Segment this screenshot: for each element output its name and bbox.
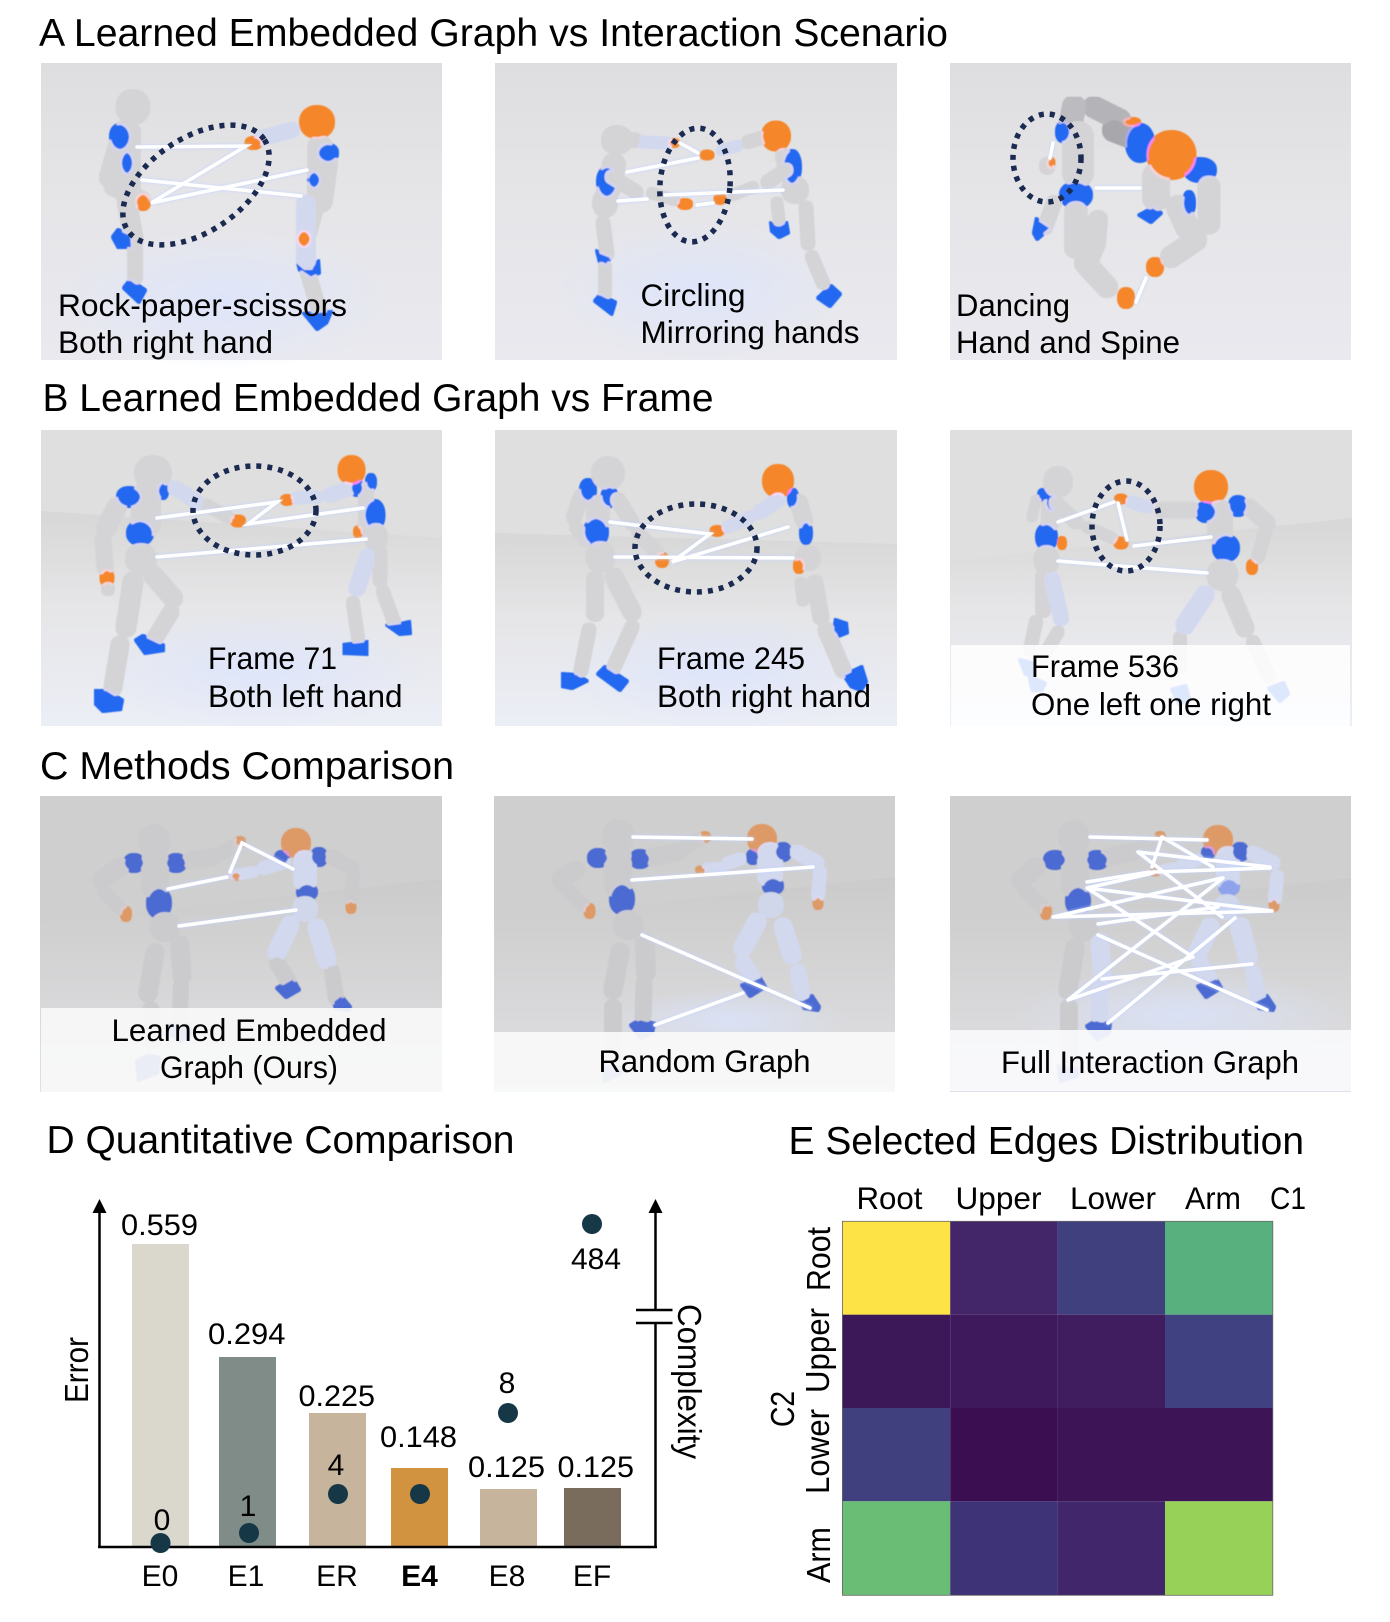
column labels: Root bbox=[856, 1180, 923, 1216]
caption C2: Random Graph bbox=[598, 1043, 810, 1079]
caption C1: Graph (Ours) bbox=[160, 1049, 338, 1085]
edges A1 bbox=[137, 146, 307, 203]
row labels: Lower bbox=[799, 1409, 836, 1494]
highlight ellipse B1 bbox=[193, 466, 316, 555]
error values: 0.125 bbox=[558, 1451, 634, 1484]
panel: A1 rock-paper-scissors bbox=[41, 63, 442, 370]
column labels: Arm bbox=[1185, 1180, 1241, 1216]
x labels: E4 bbox=[401, 1560, 438, 1593]
caption B3 bbox=[1031, 648, 1271, 722]
axes bbox=[98, 1208, 672, 1548]
panel: A2 circling bbox=[495, 63, 897, 360]
caption A2 bbox=[640, 277, 860, 350]
complexity values: 8 bbox=[499, 1367, 515, 1400]
complexity dots bbox=[150, 1214, 602, 1553]
complexity values bbox=[154, 1243, 621, 1537]
bar E4 bbox=[391, 1468, 448, 1547]
caption A1: Both right hand bbox=[58, 324, 273, 360]
figures A2 bbox=[593, 122, 841, 315]
row labels bbox=[799, 1227, 837, 1583]
error values: 0.294 bbox=[208, 1318, 286, 1351]
figures C3 bbox=[1021, 822, 1278, 1082]
caption A2: Circling bbox=[640, 277, 746, 313]
highlight ellipse A1 bbox=[102, 101, 290, 269]
overlay C1 bbox=[41, 1008, 442, 1092]
caption B3: Frame 536 bbox=[1031, 648, 1179, 684]
panel: C1 learned embedded graph bbox=[40, 796, 442, 1092]
caption B1: Frame 71 bbox=[208, 640, 337, 676]
caption A2: Mirroring hands bbox=[640, 314, 860, 350]
panel: B1 frame 71 bbox=[41, 430, 442, 730]
overlay C3 bbox=[950, 1030, 1351, 1091]
y label complexity: Complexity bbox=[671, 1304, 708, 1459]
chart: quantitative comparison bbox=[58, 1199, 708, 1593]
panel: B2 frame 245 bbox=[495, 430, 897, 730]
x labels: E1 bbox=[228, 1560, 264, 1593]
title: D: D Quantitative Comparison bbox=[46, 1119, 514, 1162]
complexity values: 484 bbox=[571, 1243, 621, 1276]
bar E0 bbox=[132, 1244, 189, 1547]
caption A1: Rock-paper-scissors bbox=[58, 287, 347, 323]
panel: C3 full interaction graph bbox=[950, 796, 1351, 1092]
row labels: Arm bbox=[800, 1527, 837, 1583]
x labels: ER bbox=[316, 1560, 358, 1593]
caption B1 bbox=[208, 640, 402, 714]
bar EF bbox=[564, 1488, 621, 1547]
x labels: E8 bbox=[489, 1560, 525, 1593]
edges A3 bbox=[1050, 143, 1146, 302]
caption A3: Hand and Spine bbox=[956, 324, 1180, 360]
overlay C2 bbox=[494, 1032, 895, 1092]
figures B1 bbox=[95, 456, 411, 712]
title: E: E Selected Edges Distribution bbox=[788, 1120, 1304, 1163]
heatmap cells bbox=[842, 1221, 1273, 1595]
error values: 0.125 bbox=[468, 1451, 545, 1484]
column labels bbox=[856, 1180, 1306, 1216]
panel: A3 dancing bbox=[950, 63, 1351, 360]
edges C2 bbox=[632, 837, 813, 1025]
title: A: A Learned Embedded Graph vs Interaction Scenario bbox=[39, 12, 948, 55]
caption B2: Both right hand bbox=[657, 678, 871, 714]
edges C1 bbox=[168, 843, 296, 926]
axis arrows bbox=[92, 1199, 662, 1213]
error values: 0.148 bbox=[380, 1421, 457, 1454]
figures B3 bbox=[1019, 467, 1289, 705]
figures B2 bbox=[562, 457, 867, 691]
error values bbox=[121, 1209, 634, 1484]
caption B2 bbox=[657, 640, 871, 714]
highlight ellipse B3 bbox=[1092, 481, 1160, 571]
y label error: Error bbox=[58, 1337, 95, 1403]
complexity values: 1 bbox=[240, 1490, 256, 1523]
column labels: Upper bbox=[956, 1180, 1042, 1216]
axis label C2: C2 bbox=[764, 1391, 801, 1427]
error values: 0.225 bbox=[298, 1380, 375, 1413]
x labels: EF bbox=[573, 1560, 611, 1593]
panel: C2 random graph bbox=[494, 796, 895, 1092]
figures A3 bbox=[1033, 107, 1216, 308]
highlight ellipse B2 bbox=[635, 504, 757, 592]
bar ER bbox=[309, 1413, 366, 1547]
figures C2 bbox=[561, 820, 822, 1082]
caption C3: Full Interaction Graph bbox=[1001, 1044, 1299, 1080]
edges B1 bbox=[157, 502, 366, 557]
edges B3 bbox=[1058, 502, 1211, 573]
highlight ellipse A2 bbox=[655, 125, 735, 245]
chart: heatmap bbox=[764, 1180, 1306, 1595]
bar E8 bbox=[480, 1489, 537, 1547]
overlay B3 bbox=[951, 645, 1350, 726]
row labels: Root bbox=[800, 1227, 837, 1291]
figures C1 bbox=[102, 825, 356, 1081]
title: B: B Learned Embedded Graph vs Frame bbox=[42, 377, 714, 420]
error values: 0.559 bbox=[121, 1209, 198, 1242]
caption B3: One left one right bbox=[1031, 686, 1271, 722]
bar E1 bbox=[219, 1357, 276, 1547]
edges A2 bbox=[618, 143, 783, 205]
title: C: C Methods Comparison bbox=[40, 745, 454, 788]
caption A3: Dancing bbox=[956, 287, 1070, 323]
edges B2 bbox=[610, 522, 793, 562]
caption A1 bbox=[58, 287, 347, 360]
caption A3 bbox=[956, 287, 1180, 360]
edges C3 bbox=[1053, 837, 1272, 1023]
caption C1: Learned Embedded bbox=[112, 1012, 386, 1048]
complexity values: 4 bbox=[328, 1449, 344, 1482]
panel: B3 frame 536 bbox=[950, 430, 1352, 726]
caption C1 bbox=[112, 1012, 386, 1085]
highlight ellipse A3 bbox=[1013, 114, 1081, 202]
caption B2: Frame 245 bbox=[657, 640, 805, 676]
figures A1 bbox=[110, 90, 338, 330]
x labels: E0 bbox=[142, 1560, 178, 1593]
caption B1: Both left hand bbox=[208, 678, 402, 714]
column labels: C1 bbox=[1270, 1180, 1306, 1216]
column labels: Lower bbox=[1070, 1180, 1156, 1216]
row labels: Upper bbox=[799, 1308, 836, 1393]
x labels bbox=[142, 1560, 611, 1593]
complexity values: 0 bbox=[154, 1504, 170, 1537]
